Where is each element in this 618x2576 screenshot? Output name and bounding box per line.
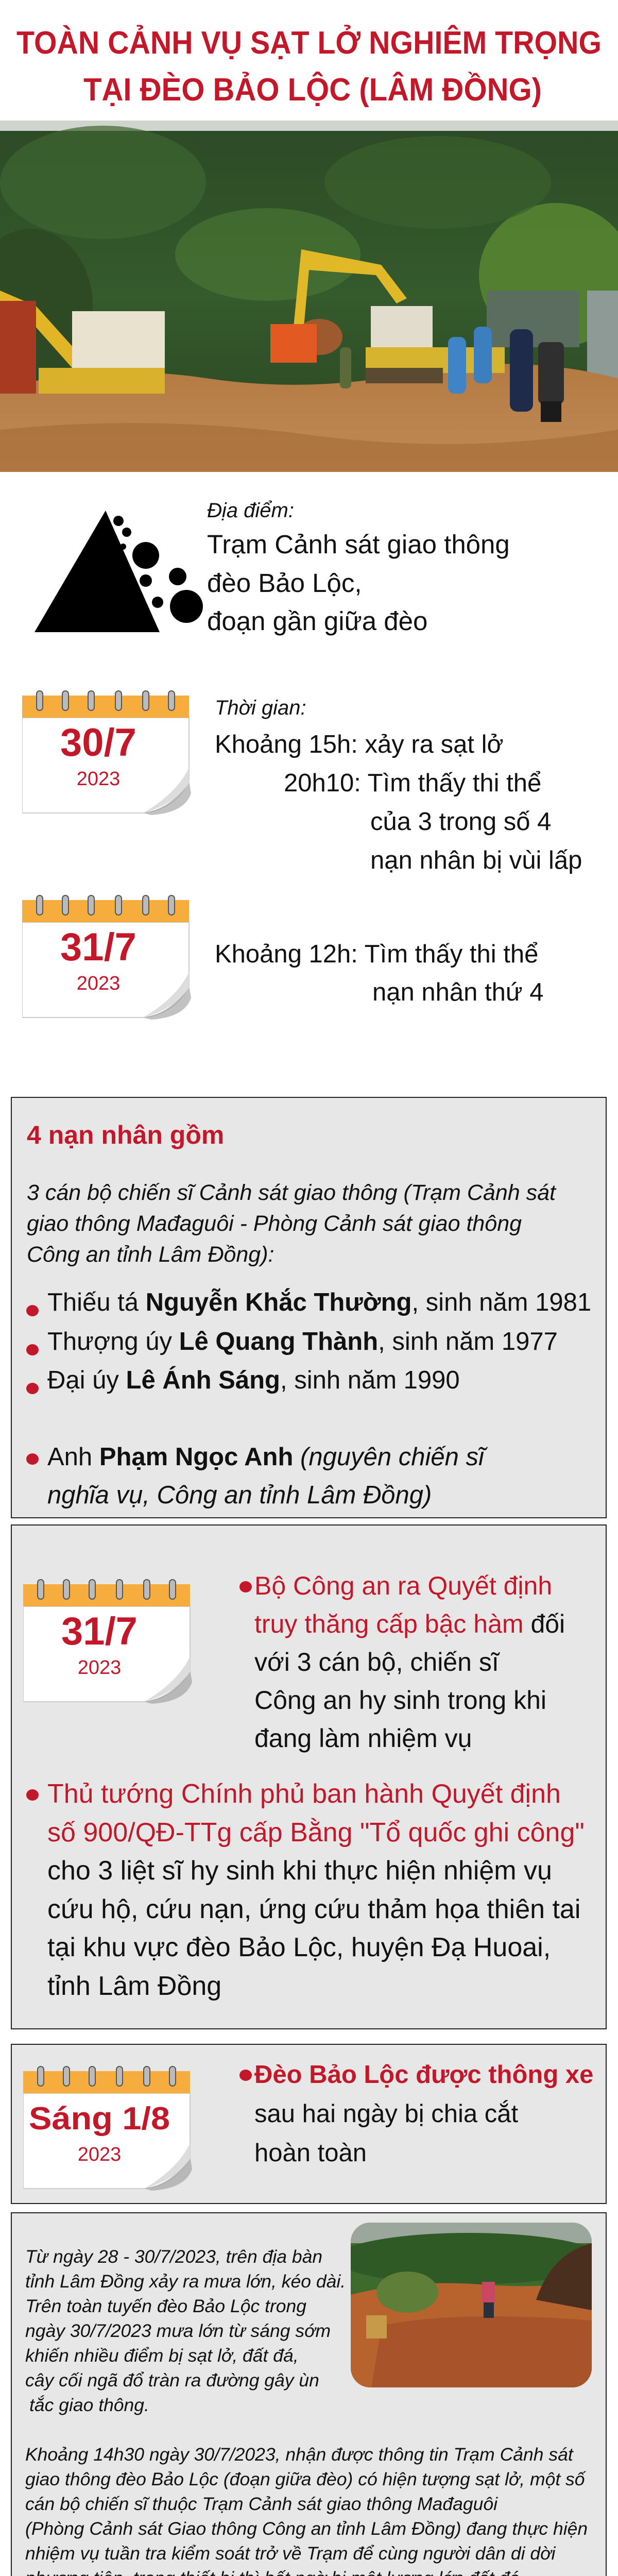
bullet: ministry decision: Công an hy sinh trong khi — [254, 1686, 546, 1715]
text: police description: giao thông Mađaguôi - Phòng Cảnh sát giao thông — [27, 1211, 522, 1236]
text: police description — [27, 1180, 556, 1267]
icon: calendar Sáng 1/8 — [23, 2066, 192, 2191]
text: location: đèo Bảo Lộc, — [207, 568, 362, 598]
text: rainfall context: tỉnh Lâm Đồng xảy ra mưa lớn, kéo dài. — [25, 2271, 346, 2292]
list: victims: Thượng úy Lê Quang Thành, sinh năm 1977 — [47, 1328, 558, 1355]
text: rainfall context: Trên toàn tuyến đèo Bảo Lộc trong — [25, 2296, 306, 2316]
text: rainfall context: khiến nhiều điểm bị sạt lở, đất đá, — [25, 2345, 299, 2366]
text: incident description: cán bộ chiến sĩ thuộc Trạm Cảnh sát giao thông Mađaguôi — [25, 2494, 497, 2514]
photo: landslide rescue scene — [0, 121, 618, 472]
icon: calendar 30/7: 2023 — [77, 768, 120, 790]
bullet: PM decision: cho 3 liệt sĩ hy sinh khi thực hiện nhiệm vụ — [47, 1856, 552, 1886]
text: incident description — [25, 2444, 588, 2576]
text: time 30/7: Thời gian: — [215, 697, 306, 719]
text: time 30/7: 20h10: Tìm thấy thi thể — [284, 769, 541, 797]
list: victims: Thiếu tá Nguyễn Khắc Thường, sinh năm 1981 — [47, 1289, 591, 1316]
panel: victims — [11, 1097, 607, 1518]
text: police description: Công an tỉnh Lâm Đồng): — [27, 1242, 274, 1267]
list: victims: Đại úy Lê Ánh Sáng, sinh năm 1990 — [47, 1366, 460, 1394]
text: incident description: nhiệm vụ tuần tra kiểm soát trở về Trạm để cùng người dân di dời — [25, 2543, 555, 2564]
text: rainfall context: Từ ngày 28 - 30/7/2023, trên địa bàn — [25, 2246, 322, 2267]
text: rainfall context: cây cối ngã đổ tràn ra đường gây ùn — [25, 2370, 319, 2391]
list: victims: Anh Phạm Ngọc Anh (nguyên chiến sĩ — [47, 1443, 484, 1471]
icon: calendar 31/7: 31/7 — [61, 1609, 138, 1653]
bullet: PM decision: Thủ tướng Chính phủ ban hành Quyết định — [47, 1779, 561, 1809]
icon: calendar Sáng 1/8: Sáng 1/8 — [29, 2101, 170, 2137]
bullet: ministry decision: với 3 cán bộ, chiến sĩ — [254, 1648, 499, 1676]
bullet: ministry decision — [239, 1571, 565, 1753]
list: victims: nghĩa vụ, Công an tỉnh Lâm Đồng) — [47, 1481, 432, 1509]
title: TẠI ĐÈO BẢO LỘC (LÂM ĐỒNG) — [83, 72, 542, 108]
panel: background info — [11, 2212, 607, 2576]
text: time 30/7: nạn nhân bị vùi lấp — [370, 846, 582, 874]
icon: calendar 30/7: 30/7 — [60, 721, 136, 765]
bullet: ministry decision: Bộ Công an ra Quyết định — [254, 1571, 552, 1600]
heading: 4 victims: 4 nạn nhân gồm — [27, 1121, 224, 1149]
bullet: ministry decision: đang làm nhiệm vụ — [254, 1724, 472, 1753]
icon: calendar 31/7: 2023 — [78, 1657, 121, 1679]
bullet: road reopened: Đèo Bảo Lộc được thông xe — [254, 2061, 593, 2089]
text: time 30/7: của 3 trong số 4 — [370, 808, 551, 836]
text: incident description: giao thông đèo Bảo Lộc (đoạn giữa đèo) có hiện tượng sạt lở, một số — [25, 2469, 585, 2489]
text: rainfall context — [25, 2246, 346, 2415]
text: time 31/7: Khoảng 12h: Tìm thấy thi thể — [215, 940, 538, 968]
bullet: road reopened: hoàn toàn — [254, 2139, 367, 2167]
text: time 31/7 — [215, 940, 544, 1006]
list: victims — [26, 1288, 591, 1509]
bullet: road reopened: sau hai ngày bị chia cắt — [254, 2100, 518, 2128]
bullet: road reopened — [239, 2061, 593, 2167]
panel: road reopened — [11, 2044, 607, 2204]
title — [16, 25, 602, 108]
icon: calendar Sáng 1/8: 2023 — [78, 2144, 121, 2165]
bullet: PM decision: tại khu vực đèo Bảo Lộc, huyện Đạ Huoai, — [47, 1933, 551, 1962]
photo: landslide site — [351, 2223, 592, 2387]
text: time 31/7: nạn nhân thứ 4 — [372, 978, 544, 1006]
text: location: đoạn gần giữa đèo — [207, 606, 427, 636]
panel: decisions 31/7 — [11, 1524, 607, 2029]
icon: calendar 31/7 — [22, 895, 191, 1020]
text: incident description: Khoảng 14h30 ngày 30/7/2023, nhận được thông tin Trạm Cảnh sát — [25, 2444, 573, 2465]
text: time 30/7: Khoảng 15h: xảy ra sạt lở — [215, 731, 504, 758]
text: location: Trạm Cảnh sát giao thông — [207, 530, 510, 559]
icon: calendar 31/7 — [23, 1579, 192, 1704]
text: rainfall context: ngày 30/7/2023 mưa lớn từ sáng sớm — [25, 2320, 331, 2341]
text: time 30/7 — [215, 697, 582, 874]
icon: calendar 30/7 — [22, 690, 191, 815]
text: police description: 3 cán bộ chiến sĩ Cảnh sát giao thông (Trạm Cảnh sát — [27, 1180, 556, 1205]
text: location — [207, 499, 510, 636]
icon: landslide — [35, 511, 203, 632]
bullet: PM decision: số 900/QĐ-TTg cấp Bằng "Tổ quốc ghi công" — [47, 1818, 585, 1848]
text: incident description: (Phòng Cảnh sát Giao thông Công an tỉnh Lâm Đồng) đang thực hiện — [25, 2518, 588, 2539]
text: rainfall context: tắc giao thông. — [29, 2395, 149, 2415]
bullet: PM decision — [26, 1779, 585, 2001]
text: location: Địa điểm: — [207, 499, 294, 522]
icon: calendar 31/7: 2023 — [77, 973, 120, 994]
bullet: PM decision: tỉnh Lâm Đồng — [47, 1971, 221, 2001]
icon: calendar 31/7: 31/7 — [60, 925, 136, 969]
bullet: PM decision: cứu hộ, cứu nạn, ứng cứu thảm họa thiên tai — [47, 1894, 580, 1924]
bullet: ministry decision: truy thăng cấp bậc hàm đối — [254, 1609, 565, 1638]
